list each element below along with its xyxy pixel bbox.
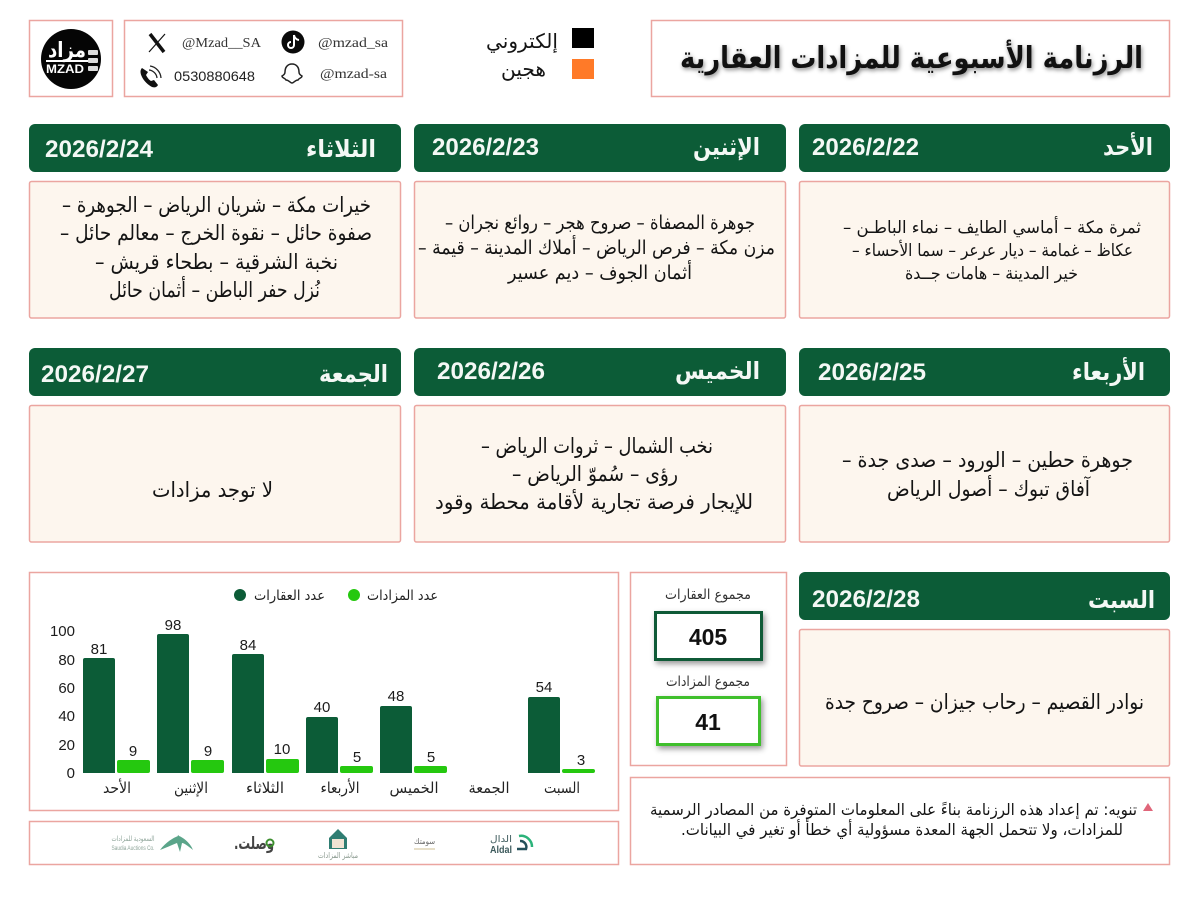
day labels: الجمعة [468, 779, 510, 797]
auction list: لا توجد مزادات [152, 478, 273, 502]
auction list [800, 182, 1170, 318]
label: hybrid: هجين [501, 57, 546, 81]
y axis labels: 40 [58, 708, 75, 725]
auction list [30, 406, 400, 542]
auction list: نُزل حفر الباطن – أثمان حائل [109, 276, 321, 302]
disclaimer text: للمزادات، ولا تتحمل الجهة المعدة مسؤولية أي خطأ أو تغير في البيانات. [681, 818, 1123, 840]
panel: title [652, 20, 1170, 96]
panel: sunday [799, 124, 1170, 318]
value labels: 10 [274, 741, 290, 758]
auction list [414, 182, 786, 318]
day labels: الثلاثاء [246, 779, 284, 797]
auction list: جوهرة المصفاة – صروح هجر – روائع نجران – [445, 212, 755, 234]
icon: phone [140, 66, 161, 87]
auction list [800, 406, 1170, 542]
day labels: الأحد [103, 778, 131, 797]
day header [29, 348, 401, 396]
logo: aldal: الدال [490, 835, 512, 845]
total properties box [656, 612, 762, 660]
value labels: 3 [577, 752, 585, 769]
day header [799, 348, 1170, 396]
icon: mzad logo: مزاد [48, 38, 86, 62]
auction list: خير المدينة – هامات جــدة [905, 264, 1078, 284]
total auctions box: 41 [695, 709, 721, 735]
logo: saudi auctions: السعودية للمزادات [112, 835, 155, 843]
value labels: 9 [129, 743, 137, 760]
day header: الأربعاء [1072, 357, 1145, 386]
logo: wasalat [234, 834, 274, 854]
auction list [414, 406, 786, 542]
value labels: 54 [536, 679, 552, 696]
value labels: 5 [353, 749, 361, 766]
icon: mzad logo: MZAD [46, 62, 84, 76]
swatch: hybrid [572, 59, 594, 79]
auction list: رؤى – سُموّ الرياض – [512, 462, 678, 486]
logo: saudi auctions: Saudia Auctions Co. [112, 845, 155, 852]
day header [799, 124, 1170, 172]
day header: 2026/2/27 [41, 361, 149, 388]
panel: totals [630, 572, 786, 766]
day header: الأحد [1103, 132, 1153, 161]
y axis labels [50, 623, 75, 782]
y axis labels: 20 [58, 737, 75, 754]
day header: 2026/2/25 [818, 359, 926, 386]
value labels: 5 [427, 749, 435, 766]
value labels [91, 617, 585, 769]
value labels: 84 [240, 637, 256, 654]
chart legend: عدد المزادات [367, 588, 438, 604]
logo: saudi auctions [112, 835, 193, 852]
logo: wasalat: وصلت. [234, 834, 274, 854]
y axis labels: 80 [58, 652, 75, 669]
auction list: نخب الشمال – ثروات الرياض – [481, 434, 713, 458]
logo: mubasher auctions: مباشر المزادات [318, 851, 358, 860]
snapchat handle: @mzad-sa [320, 67, 388, 82]
legend: auction type [486, 28, 594, 81]
day header: 2026/2/24 [45, 136, 154, 163]
panel: tuesday [29, 124, 401, 318]
auction list: صفوة حائل – نقوة الخرج – معالم حائل – [60, 221, 372, 246]
auction list: آفاق تبوك – أصول الرياض [887, 475, 1091, 501]
day header: الجمعة [319, 360, 388, 388]
logo: aldal [490, 835, 532, 856]
disclaimer text [650, 800, 1137, 840]
total properties box: 405 [689, 624, 727, 650]
icon: warning triangle [1143, 803, 1153, 811]
y axis labels: 0 [67, 765, 75, 782]
day header [414, 124, 786, 172]
auction list: أثمان الجوف – ديم عسير [507, 260, 692, 284]
day header: 2026/2/23 [432, 134, 539, 161]
day header [799, 572, 1170, 620]
panel: thursday [414, 348, 786, 542]
label: total auctions: مجموع المزادات [666, 674, 750, 690]
panel: logo [30, 20, 112, 96]
day header [29, 124, 401, 172]
panel: monday [414, 124, 786, 318]
value labels: 40 [314, 699, 330, 716]
day labels [103, 778, 580, 797]
day header [414, 348, 786, 396]
logo: sumtech [414, 837, 435, 850]
bars: auctions [117, 759, 595, 773]
day header: 2026/2/28 [812, 586, 920, 613]
auction list [30, 182, 400, 318]
icon: mzad logo [41, 29, 101, 89]
y axis labels: 60 [58, 680, 75, 697]
auction list [800, 630, 1170, 766]
panel: disclaimer [630, 778, 1170, 864]
total auctions box [658, 698, 760, 744]
tiktok handle: @mzad_sa [318, 36, 389, 51]
disclaimer text: تنويه: تم إعداد هذه الرزنامة بناءً على المعلومات المتوفرة من المصادر الرسمية [650, 800, 1137, 820]
day labels: السبت [544, 779, 580, 797]
panel: wednesday [799, 348, 1170, 542]
auction list: نوادر القصيم – رحاب جيزان – صروح جدة [825, 690, 1144, 715]
auction list: ثمرة مكة – أماسي الطايف – نماء الباطـن – [843, 216, 1141, 238]
icon: X [149, 34, 165, 52]
icon: tiktok [282, 30, 304, 54]
auction list: نخبة الشرقية – بطحاء قريش – [95, 250, 338, 274]
icon: snapchat [282, 64, 302, 83]
auction list: خيرات مكة – شريان الرياض – الجوهرة – [62, 193, 371, 217]
panel: social contacts [124, 20, 402, 96]
panel: friday [29, 348, 401, 542]
value labels: 81 [91, 641, 107, 658]
value labels: 9 [204, 743, 212, 760]
chart legend: عدد العقارات [254, 588, 325, 604]
day header: السبت [1088, 586, 1155, 614]
day header: الثلاثاء [306, 135, 376, 163]
y axis labels: 100 [50, 623, 75, 640]
day header: الخميس [675, 357, 760, 385]
day labels: الإثنين [174, 779, 208, 797]
auction list: عكاظ – غمامة – ديار عرعر – سما الأحساء – [852, 240, 1133, 261]
value labels: 98 [165, 617, 181, 634]
auction list: مزن مكة – فرص الرياض – أملاك المدينة – قيمة – [418, 235, 775, 259]
label: total properties: مجموع العقارات [665, 587, 751, 603]
swatch: electronic [572, 28, 594, 48]
value labels: 48 [388, 688, 404, 705]
logo: sumtech: سومتك [414, 837, 435, 846]
day header: الإثنين [693, 133, 760, 161]
day header: 2026/2/22 [812, 134, 919, 161]
auction list: جوهرة حطين – الورود – صدى جدة – [842, 448, 1133, 472]
auction list: للإيجار فرصة تجارية لأقامة محطة وقود [435, 489, 753, 514]
x handle: @Mzad__SA [182, 36, 262, 51]
phone number: 0530880648 [174, 68, 255, 84]
bars: properties [83, 634, 560, 773]
panel: partner logos [30, 822, 618, 864]
panel: saturday [799, 572, 1170, 766]
day labels: الخميس [390, 779, 438, 797]
day header: 2026/2/26 [437, 358, 545, 385]
logo: mubasher auctions [318, 829, 358, 860]
panel: chart [30, 572, 618, 810]
label: electronic: إلكتروني [486, 29, 558, 54]
day labels: الأربعاء [320, 778, 360, 797]
chart legend [234, 588, 438, 604]
logo: aldal: Aldal [490, 845, 512, 856]
